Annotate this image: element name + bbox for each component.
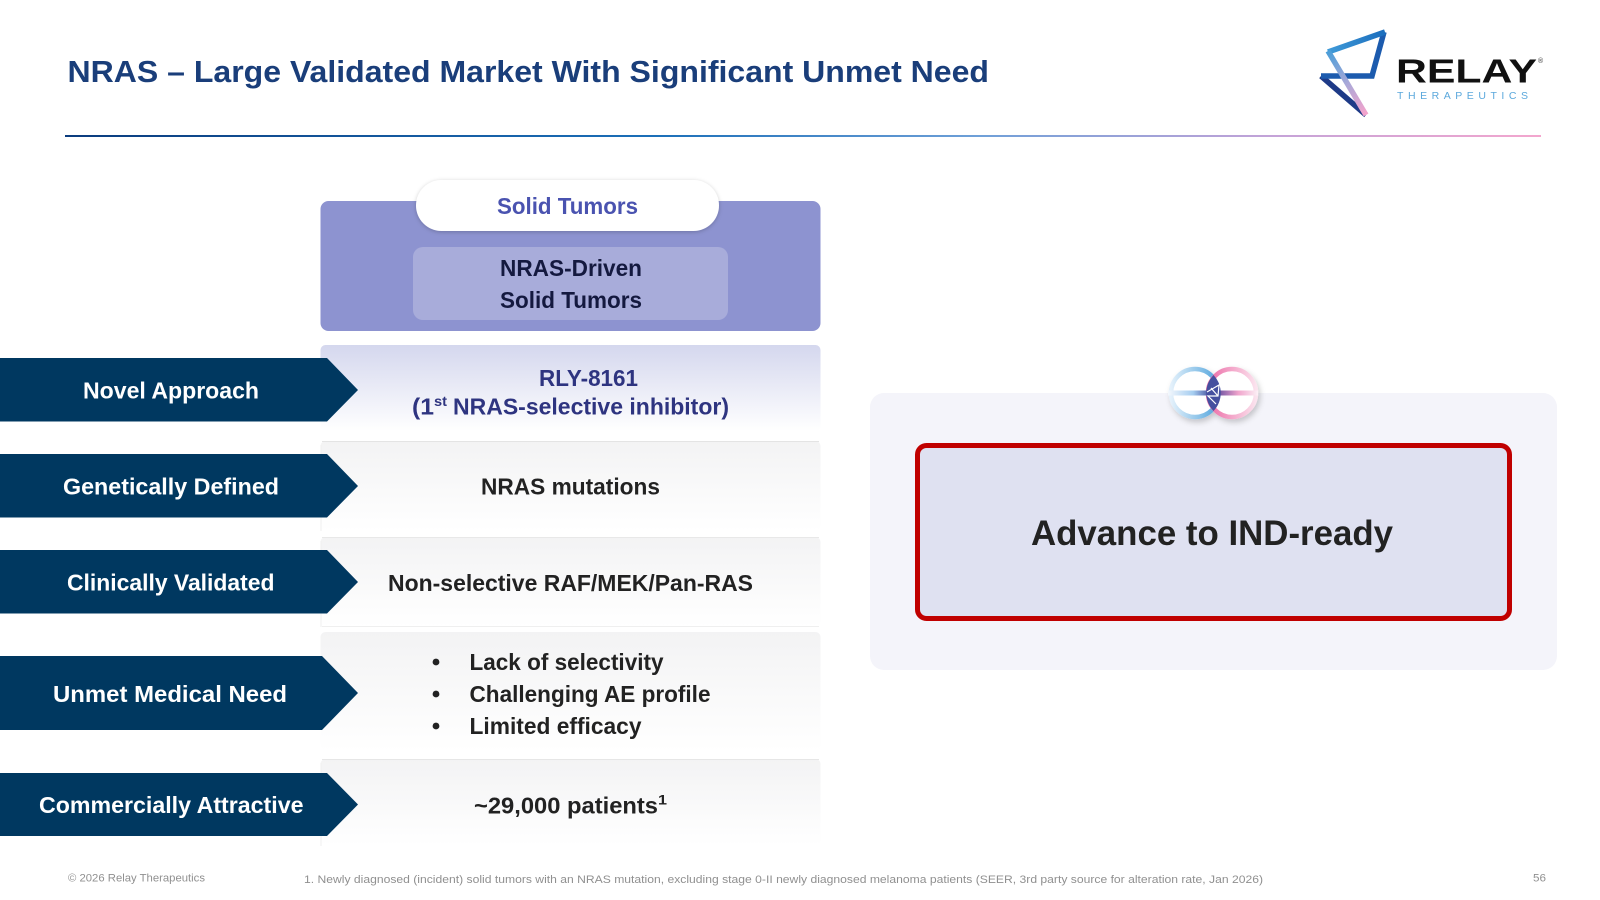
arrow: clinically validated: [0, 550, 358, 614]
panel: patients: [320, 759, 820, 846]
inner box: NRAS-driven solid tumors: Solid Tumors: [500, 287, 642, 313]
icon: overlapping rings: [1168, 369, 1258, 417]
row: genetically defined: [0, 441, 820, 531]
header divider: [65, 135, 1541, 137]
panel: next milestone: [870, 369, 1557, 670]
panel: patients: 1: [658, 792, 667, 808]
panel: NRAS mutations: [320, 441, 820, 531]
callout: advance to IND-ready: Advance to IND-ready: [1031, 513, 1393, 553]
panel: patients: ~29,000 patients: [474, 792, 658, 818]
arrow: unmet medical need: Unmet Medical Need: [53, 681, 287, 707]
row: unmet medical need: [0, 632, 820, 752]
panel: RLY-8161: RLY-8161: [539, 365, 638, 391]
milestone background: [870, 393, 1557, 670]
panel: solid tumors header: [320, 180, 820, 331]
panel: RLY-8161: (1: [412, 394, 434, 420]
bullet: limited efficacy: Limited efficacy: [470, 713, 642, 739]
arrow: novel approach: [0, 358, 358, 422]
bullet: challenging AE profile: Challenging AE profile: [470, 681, 710, 707]
panel: unmet need bullets: [320, 632, 820, 752]
row: novel approach: [0, 345, 820, 431]
bullet: lack of selectivity: Lack of selectivity: [470, 649, 664, 675]
arrow: novel approach: Novel Approach: [83, 378, 259, 404]
arrow: commercially attractive: Commercially Attractive: [39, 792, 304, 818]
panel: non-selective inhibitors: Non-selective RAF/MEK/Pan-RAS: [388, 570, 753, 596]
panel: non-selective inhibitors: [320, 537, 820, 627]
callout: advance to IND-ready: [918, 446, 1510, 618]
logo registered mark: ®: [1538, 57, 1544, 65]
icon: relay mark: [1321, 32, 1385, 115]
panel: RLY-8161: st: [434, 393, 447, 409]
panel: RLY-8161: [320, 345, 820, 431]
header background: [320, 201, 820, 331]
arrow: clinically validated: Clinically Validated: [67, 570, 274, 596]
inner box: NRAS-driven solid tumors: NRAS-Driven: [500, 255, 642, 281]
arrow: genetically defined: [0, 454, 358, 518]
title: NRAS – Large Validated Market With Significant Unmet Need: [68, 55, 989, 89]
footnote: 1. Newly diagnosed (incident) solid tumors with an NRAS mutation, excluding stage 0-II newly diagnosed melanoma patients (SEER, 3rd party source for alteration rate, Jan 2026): [304, 874, 1263, 886]
arrow: genetically defined: Genetically Defined: [63, 474, 279, 500]
panel: RLY-8161: NRAS-selective inhibitor): [453, 394, 729, 420]
logo: Relay Therapeutics: [1321, 32, 1544, 115]
panel: NRAS mutations: NRAS mutations: [481, 474, 660, 500]
row: clinically validated: [0, 537, 820, 627]
row: commercially attractive: [0, 759, 820, 846]
pill: solid tumors: Solid Tumors: [497, 193, 638, 219]
arrow: commercially attractive: [0, 773, 358, 836]
footer: copyright: © 2026 Relay Therapeutics: [68, 872, 206, 884]
page number: 56: [1533, 872, 1546, 884]
inner box: NRAS-driven solid tumors: [413, 247, 728, 320]
pill: solid tumors: [416, 180, 719, 231]
arrow: unmet medical need: [0, 656, 358, 730]
logo tagline: THERAPEUTICS: [1397, 90, 1528, 102]
logo wordmark: RELAY: [1396, 54, 1537, 90]
